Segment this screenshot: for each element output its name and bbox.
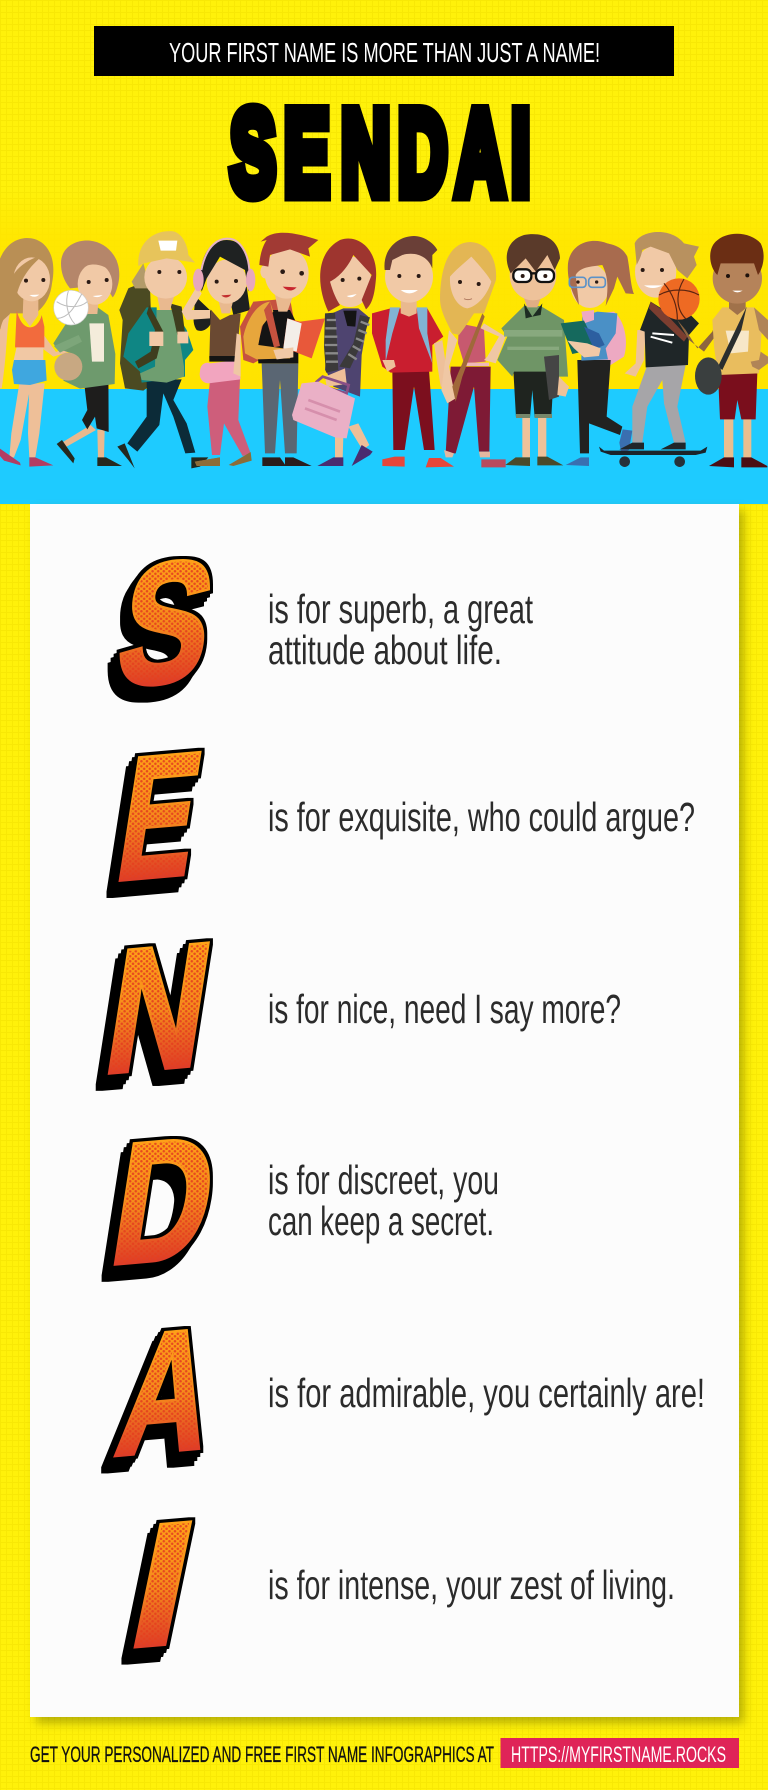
left six characters bbox=[0, 231, 376, 468]
comic letter E bbox=[106, 748, 205, 898]
character: boy in yellow tank with shoulder bag bbox=[677, 234, 768, 467]
comic letter E: E bbox=[107, 716, 212, 918]
comic letter D: D bbox=[101, 1100, 227, 1301]
illustration: group of students bbox=[0, 231, 768, 468]
character: boy with cap and backpack bbox=[117, 231, 220, 468]
description D: is for discreet, you bbox=[268, 1157, 499, 1203]
footer call to action: GET YOUR PERSONALIZED AND FREE FIRST NAME INFOGRAPHICS AT bbox=[30, 1742, 494, 1767]
letter I row bbox=[121, 1517, 672, 1665]
comic letter N bbox=[96, 938, 213, 1091]
header banner bbox=[94, 26, 674, 76]
comic letter A: A bbox=[107, 1291, 226, 1492]
comic letter I bbox=[121, 1517, 196, 1665]
character: girl with volleyball bbox=[53, 241, 122, 466]
character: boy with red backpack and book bbox=[240, 233, 325, 466]
letter D row bbox=[90, 1100, 499, 1301]
description N: is for nice, need I say more? bbox=[268, 986, 621, 1032]
letter N row bbox=[90, 906, 621, 1111]
comic letter A bbox=[101, 1326, 204, 1474]
comic letter N: N bbox=[95, 906, 223, 1111]
white card bbox=[30, 504, 744, 1723]
character: girl with ponytail, tablet and pink backpack bbox=[561, 241, 634, 466]
comic letter S bbox=[108, 556, 213, 703]
description S bbox=[268, 586, 533, 673]
character: girl with headphones bbox=[182, 239, 255, 466]
title: SENDAI bbox=[230, 86, 530, 220]
icon: basketball bbox=[658, 278, 700, 320]
description D bbox=[268, 1157, 499, 1244]
letter A row bbox=[90, 1291, 705, 1492]
comic letter S: S bbox=[107, 523, 226, 723]
character: boy with glasses and green sweater bbox=[497, 234, 569, 466]
comic letter I: I bbox=[116, 1485, 209, 1685]
description S: is for superb, a great bbox=[268, 586, 533, 632]
comic letter D bbox=[102, 1136, 213, 1282]
character: boy in red shirt with blue backpack bbox=[372, 236, 454, 467]
character: blonde girl bbox=[440, 242, 506, 467]
character: girl in orange top bbox=[0, 238, 81, 467]
letter E row bbox=[90, 716, 695, 918]
icon: volleyball bbox=[54, 290, 88, 325]
character: girl with pink suitcase bbox=[292, 239, 376, 466]
right six characters bbox=[372, 232, 768, 467]
letter S row bbox=[90, 523, 533, 723]
description S: attitude about life. bbox=[268, 627, 502, 673]
description D: can keep a secret. bbox=[268, 1198, 494, 1244]
icon: skateboard bbox=[599, 447, 707, 467]
character: skater boy with basketball bbox=[599, 232, 707, 467]
blue floor band bbox=[0, 389, 768, 504]
